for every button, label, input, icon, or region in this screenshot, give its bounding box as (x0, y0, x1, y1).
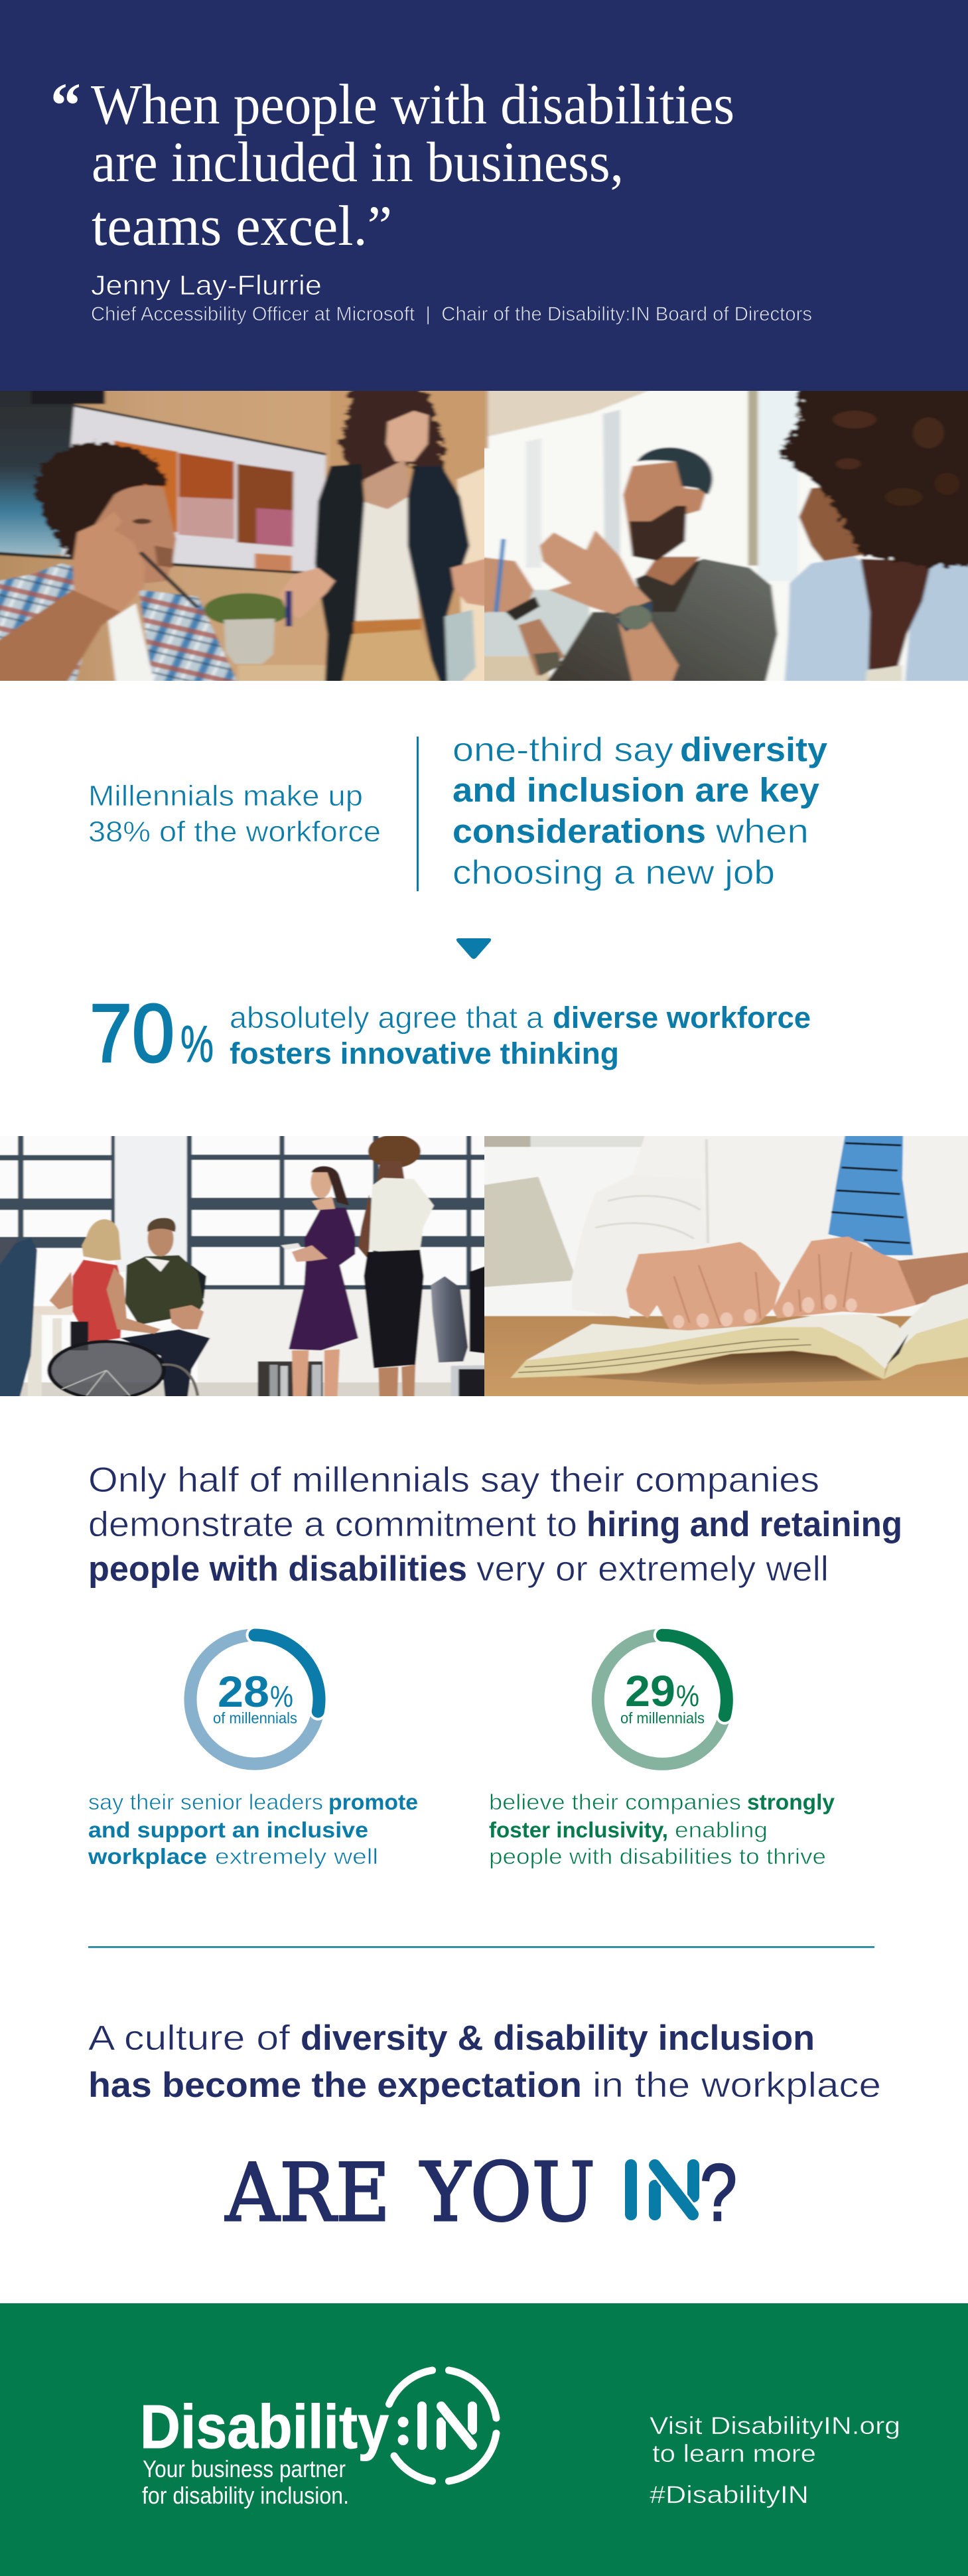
text: senior leaders promote (88, 1790, 418, 1869)
panel: hiring and retaining section (88, 1461, 902, 1948)
icon: down arrow (456, 938, 491, 959)
left hand (626, 1242, 780, 1332)
heading: only half of millennials: Only half of millennials say their companies (88, 1461, 819, 1500)
woman in purple dress (291, 1350, 310, 1396)
photo: office colleagues with wheelchair user (0, 1136, 484, 1396)
heading: only half of millennials (88, 1461, 902, 1589)
icon: opening quotation mark: “ (50, 70, 81, 141)
text: companies foster inclusivity: believe their companies (489, 1790, 741, 1814)
quote text: are included in business, (92, 130, 624, 194)
text: millennials share of workforce: 38% of the workforce (88, 816, 381, 848)
headline: are you in (225, 2145, 737, 2240)
chart: 29 percent donut: of millennials (620, 1709, 705, 1727)
panel: footer (0, 2303, 968, 2576)
right half of team photo (484, 391, 968, 681)
logo tagline: Your business partner (143, 2455, 346, 2482)
text: millennials share of workforce (88, 780, 381, 848)
footer call to action text: to learn more (652, 2440, 816, 2467)
man in green sweater (192, 1265, 206, 1299)
text: diverse workforce fosters innovative thinking: fosters innovative thinking (230, 1037, 619, 1070)
text: senior leaders promote: say their senior leaders (88, 1790, 323, 1814)
stat: 70 percent: 70 (90, 988, 174, 1080)
heading: only half of millennials: demonstrate a commitment to (88, 1505, 577, 1544)
text: culture of diversity and disability inclusion (88, 2019, 881, 2105)
text: one-third say diversity and inclusion: when (715, 812, 809, 850)
chart: 28 percent donut: of millennials (213, 1709, 297, 1727)
footer call to action text: Visit DisabilityIN.org (650, 2412, 900, 2439)
quote text (91, 72, 734, 257)
text: diverse workforce fosters innovative thinking: diverse workforce (553, 1001, 811, 1035)
footer call to action text (650, 2412, 900, 2508)
attribution role: Chief Accessibility Officer at Microsoft | Chair of the Disability:IN Board of Directors (91, 303, 812, 325)
text: one-third say diversity and inclusion: one-third say (452, 731, 674, 768)
text: companies foster inclusivity: strongly (747, 1790, 835, 1814)
text: one-third say diversity and inclusion (452, 731, 828, 891)
text: senior leaders promote: extremely well (215, 1844, 378, 1869)
logo tagline: for disability inclusion. (142, 2482, 349, 2509)
woman with dark jacket (340, 384, 443, 484)
text: senior leaders promote: and support an inclusive (88, 1818, 368, 1842)
heading: only half of millennials: hiring and retaining (587, 1505, 902, 1544)
text: culture of diversity and disability inclusion: in the workplace (592, 2066, 881, 2105)
text: millennials share of workforce: Millennials make up (88, 780, 363, 812)
text: one-third say diversity and inclusion: and inclusion are key (452, 771, 820, 809)
chart: 29 percent donut: 29 (625, 1666, 675, 1715)
chart: 28 percent donut: 28 (218, 1667, 269, 1716)
logo tagline (142, 2455, 349, 2509)
chart: 29 percent donut: % (676, 1679, 699, 1713)
woman in white top (368, 1135, 421, 1168)
icon: IN wordmark (631, 2165, 693, 2214)
headline: are you in: ARE (225, 2147, 390, 2240)
open book (577, 1351, 882, 1385)
panel: quote header (0, 0, 968, 391)
text: culture of diversity and disability inclusion: has become the expectation (88, 2066, 582, 2105)
man with plaid shirt (0, 563, 84, 681)
footer call to action text: #DisabilityIN (650, 2481, 809, 2508)
text: companies foster inclusivity (489, 1790, 835, 1869)
woman in wheelchair (82, 1219, 121, 1261)
headline: are you in: ? (700, 2147, 737, 2238)
left half of team photo (0, 391, 484, 681)
text: culture of diversity and disability inclusion: diversity & disability inclusion (301, 2019, 815, 2058)
stat: 70 percent: % (180, 1015, 214, 1073)
gesturing man (545, 558, 779, 681)
text: companies foster inclusivity: people with disabilities to thrive (489, 1844, 826, 1869)
shirt and tie (617, 1136, 654, 1319)
text: companies foster inclusivity: enabling (675, 1818, 768, 1842)
photo: colleagues meeting around a table (0, 378, 968, 696)
text: companies foster inclusivity: foster inclusivity, (489, 1818, 668, 1842)
woman with curly hair (783, 556, 876, 681)
chart: 28 percent donut: % (270, 1680, 293, 1713)
quote text: When people with disabilities (91, 72, 734, 136)
text: diverse workforce fosters innovative thinking: absolutely agree that a (230, 1001, 544, 1035)
headline: are you in: YOU (419, 2145, 595, 2240)
text: one-third say diversity and inclusion: choosing a new job (452, 853, 775, 891)
text: one-third say diversity and inclusion: considerations (452, 812, 706, 850)
photo: hands reading a braille book (484, 1136, 968, 1396)
text: diverse workforce fosters innovative thinking (230, 1001, 811, 1070)
text: one-third say diversity and inclusion: diversity (680, 731, 828, 768)
quote text: teams excel.” (92, 194, 392, 257)
panel: culture of inclusion call to action (88, 2019, 881, 2240)
heading: only half of millennials: very or extremely well (476, 1549, 829, 1589)
right hand and forearm (772, 1236, 917, 1319)
logo: Disability:IN (140, 2370, 496, 2481)
panel: millennials statistics (88, 731, 828, 1080)
logo: Disability:IN: Disability (140, 2392, 389, 2461)
chart: 29 percent donut (598, 1635, 726, 1764)
text: culture of diversity and disability inclusion: A culture of (88, 2019, 290, 2058)
text: senior leaders promote: workplace (88, 1844, 207, 1869)
heading: only half of millennials: people with disabilities (88, 1549, 467, 1589)
attribution name: Jenny Lay-Flurrie (91, 269, 322, 301)
text: senior leaders promote: promote (328, 1790, 418, 1814)
chart: 28 percent donut (190, 1635, 319, 1764)
